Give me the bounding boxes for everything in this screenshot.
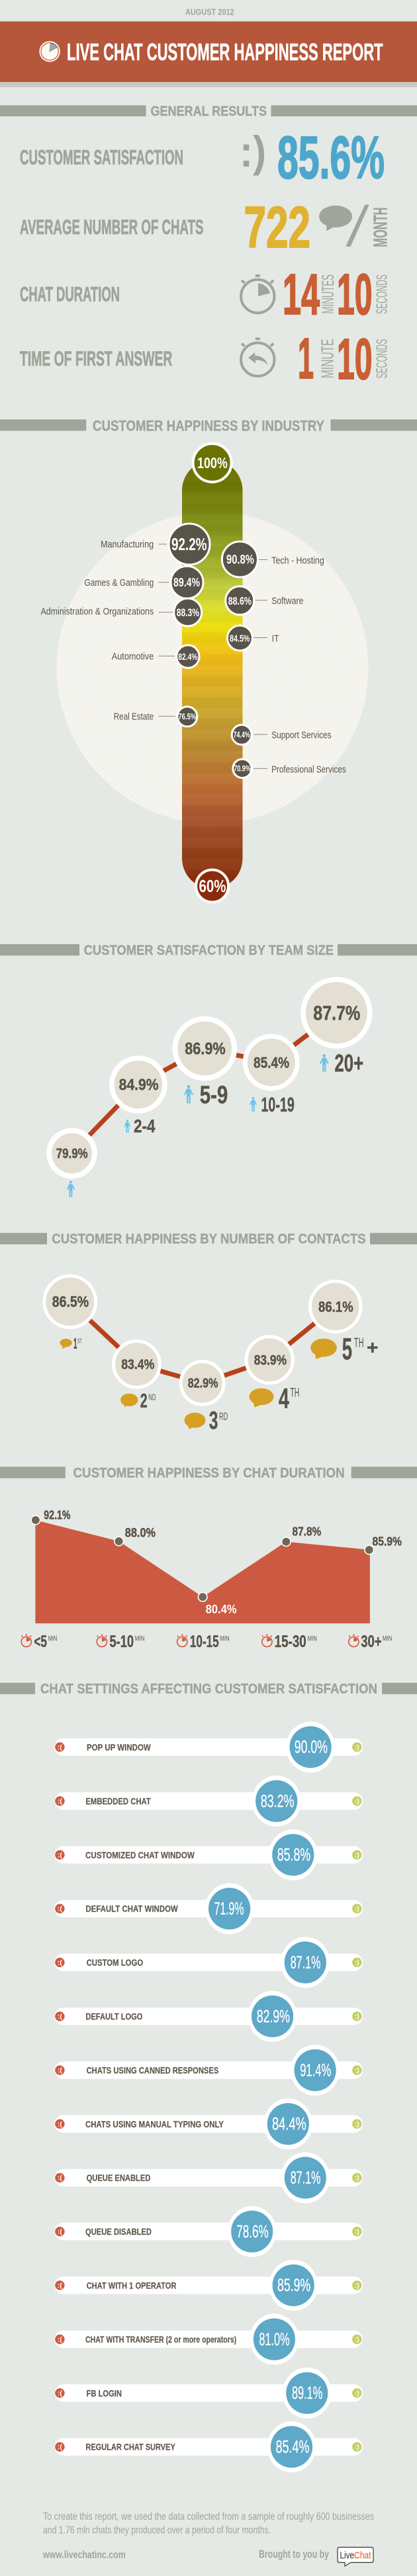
row: pop up window: POP UP WINDOW <box>87 1742 151 1752</box>
icon: person, size 1 <box>67 1181 75 1197</box>
title banner <box>0 21 417 87</box>
axis label: 15-30 min: MIN <box>307 1635 317 1643</box>
row: customized chat window <box>54 1830 363 1880</box>
contact label: 2nd: ND <box>148 1392 156 1402</box>
contact label: 5th+: TH <box>354 1336 364 1351</box>
unit: minute: MINUTE <box>318 339 338 378</box>
logo: LiveChat <box>338 2547 373 2566</box>
row: embedded chat: :) <box>355 1798 359 1805</box>
row: regular chat survey <box>54 2421 363 2472</box>
contact label: 3rd <box>184 1407 228 1435</box>
data point: 87.8% <box>282 1524 321 1546</box>
row: fb login: :) <box>355 2390 359 2397</box>
icon: stopwatch <box>241 274 275 313</box>
scale top: 100%: 100% <box>197 454 228 471</box>
bubble: 85.4% <box>245 1036 297 1088</box>
marker: support services <box>232 725 332 745</box>
unit: month: MONTH <box>371 208 392 247</box>
axis label: 5-10 min <box>97 1633 145 1651</box>
marker: real estate: Real Estate <box>114 711 154 722</box>
bubble: 87.7%: 87.7% <box>313 1002 360 1025</box>
marker: automotive: 82.4% <box>178 651 198 662</box>
heading: by number of contacts: CUSTOMER HAPPINESS BY NUMBER OF CONTACTS <box>52 1232 366 1247</box>
contact label: 5th+: 5 <box>342 1332 352 1366</box>
marker: games and gambling: 89.4% <box>173 576 200 589</box>
row: chat with 1 operator: 85.9% <box>277 2275 310 2295</box>
footer <box>42 2511 374 2566</box>
stat: 722: 722 <box>244 194 310 260</box>
scale bottom: 60% <box>196 870 228 902</box>
label: average number of chats: AVERAGE NUMBER OF CHATS <box>20 215 203 239</box>
section: customer happiness by number of contacts <box>0 1232 417 1435</box>
row: customized chat window: :( <box>58 1852 63 1859</box>
icon: stopwatch with back arrow <box>241 337 275 376</box>
row: chat with transfer: :) <box>355 2337 359 2343</box>
heading: by team size: CUSTOMER SATISFACTION BY TEAM SIZE <box>84 943 334 958</box>
heading: general results: GENERAL RESULTS <box>151 104 267 119</box>
stat: 14 minutes: 14 <box>283 262 320 327</box>
bubble: 84.9%: 84.9% <box>119 1076 159 1094</box>
row: fb login: :( <box>58 2390 63 2397</box>
row: custom logo <box>54 1937 363 1988</box>
label: chat duration: CHAT DURATION <box>20 282 120 305</box>
team label: 2-4: 2-4 <box>134 1116 156 1137</box>
row: chat with transfer: :( <box>58 2337 63 2343</box>
row: default chat window: :) <box>355 1906 359 1913</box>
contact label: 4th: 4 <box>279 1383 289 1414</box>
axis label: 10-15 min: 10-15 <box>190 1633 219 1651</box>
scale bottom: 60%: 60% <box>199 876 226 896</box>
row: chat with 1 operator: :( <box>58 2282 63 2290</box>
team label: 5-9: 5-9 <box>200 1081 228 1109</box>
bubble: 87.7% <box>303 979 370 1046</box>
axis label: 5-10 min: 5-10 <box>110 1633 134 1651</box>
row: queue enabled: :( <box>58 2175 63 2182</box>
bubble: 86.1% <box>310 1281 361 1332</box>
row: default logo <box>54 1991 363 2042</box>
line chart connector <box>70 1302 336 1383</box>
row: default logo: :( <box>58 2013 63 2021</box>
icon: speech bubble <box>319 206 352 231</box>
section: customer happiness by industry <box>0 418 417 902</box>
marker: administration and organizations: 88.3% <box>177 607 199 619</box>
heading: by team size <box>0 943 417 958</box>
row: customized chat window: :) <box>355 1852 359 1859</box>
axis label: 30+ min: MIN <box>383 1635 392 1643</box>
marker: manufacturing: 92.2% <box>171 534 207 554</box>
marker: automotive <box>112 645 199 668</box>
axis label: under 5 min: MIN <box>48 1635 57 1643</box>
marker: real estate: 76.5% <box>178 712 196 721</box>
section: customer satisfaction by team size <box>0 943 417 1197</box>
methodology note: and 1.76 mln chats they produced over a period of four months. <box>43 2525 271 2536</box>
bubble: 83.9% <box>246 1337 293 1383</box>
bubble: 79.9%: 79.9% <box>56 1147 88 1162</box>
data point: 88.0%: 88.0% <box>125 1527 156 1541</box>
marker: automotive: Automotive <box>112 652 154 663</box>
contact label: 1st <box>60 1335 82 1351</box>
team label: 10-19 <box>250 1094 295 1116</box>
data point: 85.9%: 85.9% <box>372 1534 402 1548</box>
marker: games and gambling <box>84 566 203 598</box>
data point: 80.4%: 80.4% <box>206 1602 237 1616</box>
stat: 10 seconds: 10 <box>337 327 372 391</box>
marker: tech hosting: 90.8% <box>226 553 254 567</box>
row: chats using manual typing only <box>54 2099 363 2150</box>
row: pop up window: :( <box>58 1744 63 1751</box>
row: chat with 1 operator: :) <box>355 2282 359 2290</box>
bubble: 86.9% <box>175 1019 234 1078</box>
contact label: 4th <box>249 1383 299 1414</box>
section: general results <box>0 104 417 391</box>
bubble: 83.4% <box>114 1341 160 1387</box>
label: time of first answer: TIME OF FIRST ANSWER <box>20 346 173 370</box>
row: queue disabled: QUEUE DISABLED <box>85 2227 152 2237</box>
team label: 5-9 <box>184 1081 228 1109</box>
heading: by industry: CUSTOMER HAPPINESS BY INDUSTRY <box>93 418 324 434</box>
data point: 80.4% <box>198 1592 237 1616</box>
row: queue disabled: :) <box>355 2228 359 2236</box>
row: default chat window: DEFAULT CHAT WINDOW <box>85 1904 178 1914</box>
row: fb login <box>54 2368 363 2419</box>
row: chats using canned responses <box>54 2044 363 2096</box>
marker: professional services: 70.9% <box>234 764 251 774</box>
row: embedded chat: EMBEDDED CHAT <box>85 1796 151 1806</box>
label: customer satisfaction: CUSTOMER SATISFACTION <box>20 145 183 169</box>
row: customized chat window: 85.8% <box>277 1845 310 1865</box>
bubble: 82.9%: 82.9% <box>188 1377 218 1391</box>
bubble: 85.4%: 85.4% <box>254 1054 289 1071</box>
row: chat with 1 operator: CHAT WITH 1 OPERATOR <box>87 2280 177 2290</box>
row: regular chat survey: 85.4% <box>275 2436 310 2456</box>
row: queue enabled: :) <box>355 2175 359 2182</box>
marker: software: Software <box>271 596 303 606</box>
marker: administration and organizations: Administration & Organizations <box>41 607 154 618</box>
contact label: 2nd: 2 <box>140 1390 148 1412</box>
marker: professional services: Professional Services <box>271 764 346 775</box>
axis label: 30+ min <box>348 1633 392 1651</box>
slash <box>346 205 369 247</box>
methodology note <box>43 2511 374 2536</box>
row: regular chat survey: REGULAR CHAT SURVEY <box>85 2442 175 2452</box>
unit: minutes: MINUTES <box>319 274 338 313</box>
row: embedded chat <box>54 1775 363 1827</box>
row: default logo: 82.9% <box>257 2006 290 2026</box>
marker: IT: 84.5% <box>230 633 250 644</box>
bubble: 79.9% <box>49 1131 95 1176</box>
marker: professional services <box>233 759 346 778</box>
data point: 88.0% <box>115 1527 156 1546</box>
axis label: 5-10 min: MIN <box>135 1635 145 1643</box>
data point: 92.1% <box>31 1508 70 1525</box>
row: queue enabled: 87.1% <box>291 2167 320 2187</box>
row: chats using manual typing only: :) <box>355 2121 359 2128</box>
row: default logo: DEFAULT LOGO <box>85 2012 142 2022</box>
row: default chat window <box>54 1883 363 1934</box>
logo: LiveChat: Chat <box>354 2551 371 2561</box>
row: chats using manual typing only: 84.4% <box>272 2114 306 2134</box>
heading: by chat duration: CUSTOMER HAPPINESS BY CHAT DURATION <box>73 1465 345 1480</box>
contact label: 3rd: RD <box>219 1412 228 1423</box>
bubble: 83.9%: 83.9% <box>254 1353 287 1368</box>
axis label: 15-30 min: 15-30 <box>275 1633 306 1651</box>
row: chat with 1 operator <box>54 2260 363 2311</box>
contact label: 5th+ <box>310 1332 379 1366</box>
contact label: 1st: ST <box>77 1338 82 1345</box>
contact label: 2nd <box>120 1390 156 1412</box>
row: embedded chat: :( <box>58 1798 63 1805</box>
data point: 85.9% <box>365 1534 402 1554</box>
credit: Brought to you by <box>259 2548 329 2561</box>
team label: 2-4 <box>124 1116 156 1137</box>
row: chat with transfer: CHAT WITH TRANSFER (2 or more operators) <box>85 2335 236 2345</box>
contact label: 5th+: + <box>367 1338 379 1359</box>
marker: software: 88.6% <box>228 594 252 607</box>
contact label: 4th: TH <box>290 1386 299 1400</box>
marker: administration and organizations <box>41 598 202 626</box>
row: pop up window <box>54 1722 363 1773</box>
row: queue disabled <box>54 2206 363 2257</box>
marker: IT <box>227 625 279 651</box>
row: custom logo: CUSTOM LOGO <box>87 1958 143 1968</box>
marker: support services: Support Services <box>271 730 332 741</box>
contact label: 3rd: 3 <box>209 1407 218 1435</box>
row: chat with transfer <box>54 2314 363 2365</box>
marker: software <box>226 586 303 615</box>
row: chat with transfer: 81.0% <box>259 2329 290 2349</box>
heading: chat settings: CHAT SETTINGS AFFECTING CUSTOMER SATISFACTION <box>40 1681 377 1697</box>
row: fb login: FB LOGIN <box>87 2388 122 2398</box>
row: chats using canned responses: 91.4% <box>300 2060 331 2080</box>
axis label: 10-15 min: MIN <box>220 1635 230 1643</box>
row: default logo: :) <box>355 2013 359 2021</box>
thermometer scale <box>182 460 242 889</box>
scale top: 100% <box>193 444 232 482</box>
row: chats using manual typing only: :( <box>58 2121 63 2128</box>
row: fb login: 89.1% <box>292 2383 322 2403</box>
section: customer happiness by chat duration <box>0 1465 417 1651</box>
row: chats using manual typing only: CHATS USING MANUAL TYPING ONLY <box>85 2119 224 2129</box>
team label: 20+: 20+ <box>334 1049 363 1076</box>
row: chats using canned responses: :) <box>355 2067 359 2075</box>
heading: general results <box>0 104 417 119</box>
bubble: 84.9% <box>112 1058 165 1111</box>
marker: games and gambling: Games & Gambling <box>84 578 154 588</box>
row: regular chat survey: :( <box>58 2444 63 2451</box>
contact label: 1st: 1 <box>73 1335 77 1351</box>
axis label: under 5 min <box>21 1633 57 1651</box>
unit: seconds: SECONDS <box>373 274 391 314</box>
axis label: under 5 min: <5 <box>34 1633 47 1651</box>
bubble: 86.1%: 86.1% <box>318 1299 353 1315</box>
row: default chat window: 71.9% <box>214 1898 244 1918</box>
bubble: 86.9%: 86.9% <box>185 1039 226 1058</box>
heading: by industry <box>0 418 417 434</box>
row: regular chat survey: :) <box>355 2444 359 2451</box>
row: queue disabled: 78.6% <box>236 2222 269 2241</box>
row: queue enabled: QUEUE ENABLED <box>87 2173 151 2183</box>
marker: manufacturing <box>101 524 210 565</box>
section: general results: 1 <box>298 327 314 391</box>
row: custom logo: :) <box>355 1960 359 1966</box>
data point: 92.1%: 92.1% <box>44 1508 70 1521</box>
row: chats using canned responses: CHATS USING CANNED RESPONSES <box>87 2066 218 2075</box>
section: chat settings affecting customer satisfaction <box>0 1681 417 2472</box>
background circle <box>57 512 368 824</box>
website url: www.livechatinc.com <box>42 2550 126 2561</box>
stat: 10 seconds: 10 <box>337 262 372 327</box>
row: queue enabled <box>54 2152 363 2203</box>
marker: real estate <box>114 707 197 727</box>
marker: tech hosting: Tech - Hosting <box>271 556 324 567</box>
marker: support services: 74.4% <box>234 731 250 740</box>
axis label: 30+ min: 30+ <box>361 1633 382 1651</box>
bubble: 86.5% <box>44 1276 96 1328</box>
row: embedded chat: 83.2% <box>261 1791 294 1811</box>
row: custom logo: :( <box>58 1960 63 1966</box>
team label: 10-19: 10-19 <box>261 1094 295 1116</box>
row: custom logo: 87.1% <box>291 1952 320 1972</box>
bubble: 83.4%: 83.4% <box>121 1357 155 1373</box>
row: queue disabled: :( <box>58 2228 63 2236</box>
bubble: 82.9% <box>181 1361 224 1404</box>
date line: AUGUST 2012 <box>185 7 234 17</box>
line chart connector <box>71 1013 336 1153</box>
marker: IT: IT <box>272 633 279 644</box>
data point: 87.8%: 87.8% <box>293 1524 321 1538</box>
marker: tech hosting <box>222 542 324 577</box>
team label: 20+ <box>320 1049 363 1076</box>
row: pop up window: :) <box>355 1744 359 1751</box>
row: pop up window: 90.0% <box>295 1737 328 1757</box>
bubble: 86.5%: 86.5% <box>52 1293 89 1310</box>
row: chats using canned responses: :( <box>58 2067 63 2075</box>
logo: LiveChat: Live <box>340 2551 354 2561</box>
row: customized chat window: CUSTOMIZED CHAT WINDOW <box>85 1850 195 1860</box>
marker: manufacturing: Manufacturing <box>101 540 154 550</box>
row: default chat window: :( <box>58 1906 63 1913</box>
area chart <box>35 1520 370 1623</box>
icon: smiley: :) <box>240 127 266 176</box>
unit: seconds: SECONDS <box>373 339 391 378</box>
icon: pie chart logo <box>39 41 60 62</box>
